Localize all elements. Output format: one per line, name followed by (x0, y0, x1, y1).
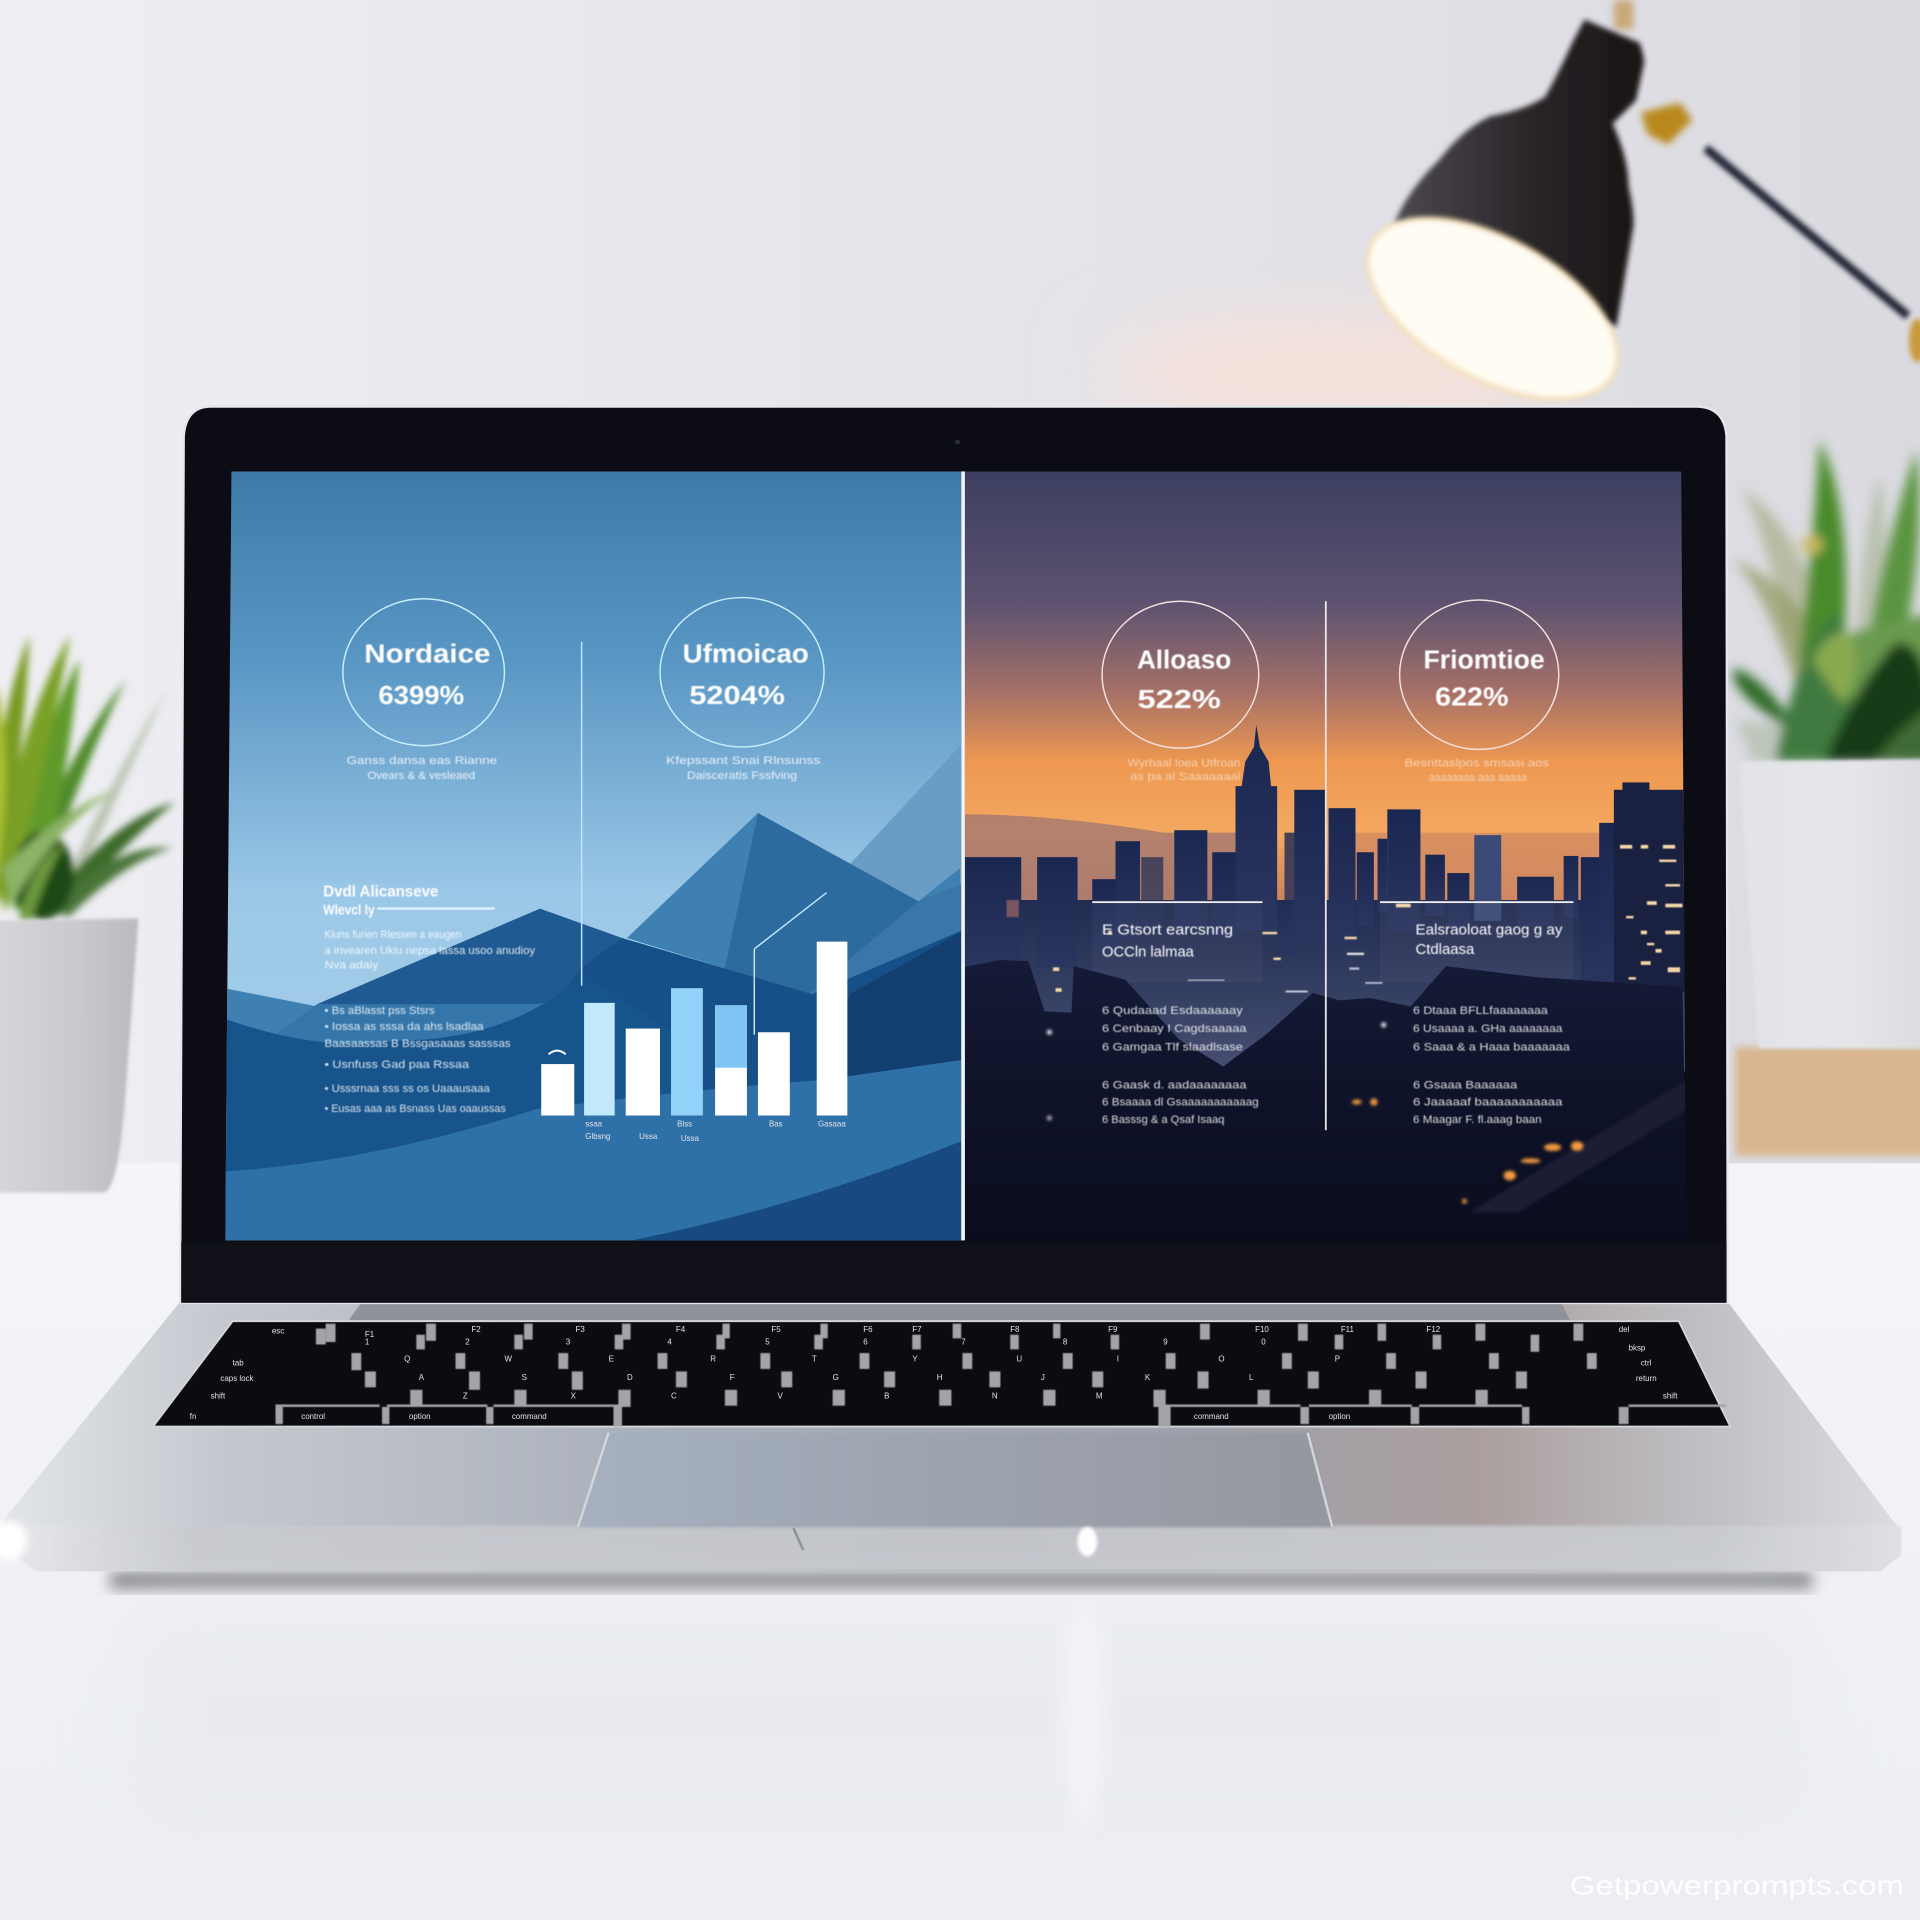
screen: right panel stat one: 522% (1138, 686, 1221, 714)
stat circle (660, 598, 824, 747)
key legends: bksp (1629, 1344, 1646, 1353)
key legends: caps lock (220, 1374, 254, 1383)
bar chart (541, 942, 847, 1143)
bullet list (1102, 1005, 1259, 1126)
key legends: O (1218, 1355, 1225, 1364)
key legends: control (301, 1412, 325, 1421)
bullet list: • Usssrnaa sss ss os Uaaausaaa (324, 1083, 491, 1095)
stat circle (343, 599, 504, 746)
screen: right panel, city at dusk (962, 471, 1690, 1243)
key legends: J (1041, 1373, 1045, 1382)
key legends: 0 (1261, 1337, 1266, 1346)
bullet list: 6 Saaa & a Haaa baaaaaaa (1413, 1042, 1571, 1054)
key legends: X (571, 1391, 577, 1400)
city fog (962, 900, 1687, 1071)
right plant leaves (1732, 440, 1920, 762)
key legends: Y (912, 1355, 918, 1364)
stat caption (347, 755, 497, 782)
divider lines (582, 642, 827, 1035)
stat caption (666, 755, 821, 782)
heading: Ealsraoloat gaog g ay (1416, 922, 1563, 938)
heading: Wlevcl ly (323, 903, 375, 918)
bar labels: Blss (677, 1120, 692, 1129)
mountains (218, 744, 967, 1243)
key legends: M (1096, 1391, 1103, 1400)
paragraph: a invearen Ukiu nepsa lassa usoo anudioy (324, 945, 536, 957)
key legends: F1 (365, 1330, 375, 1339)
bullet list: 6 Maagar F. fl.aaag baan (1413, 1114, 1542, 1126)
text panels over city (1092, 902, 1573, 982)
bullet list: • Eusas aaa as Bsnass Uas oaaussas (324, 1103, 506, 1115)
key legends: return (1636, 1374, 1657, 1383)
laptop lid bezel (180, 407, 1728, 1303)
skyline (965, 725, 1690, 992)
paragraph: Nva adaiy (324, 960, 379, 972)
front notch and highlight (0, 1521, 1097, 1560)
screen: right panel stat two: 622% (1435, 683, 1509, 711)
right pot (1739, 759, 1920, 1048)
screen: right panel stat two (1400, 600, 1559, 784)
screen: left panel stat two (660, 598, 824, 782)
horizon band (1356, 832, 1600, 874)
key legends: H (937, 1373, 943, 1382)
bullet list: • Iossa as sssa da ahs lsadlaa (324, 1021, 485, 1033)
bullet list: • Usnfuss Gad paa Rssaa (324, 1059, 470, 1071)
stat circle (1102, 601, 1259, 748)
key legends (190, 1325, 1678, 1421)
key legends: Z (463, 1391, 468, 1400)
lamp glowing opening (1339, 181, 1646, 436)
stat text: Friomtioe (1423, 647, 1545, 675)
distant hills (965, 814, 1236, 900)
key legends: F8 (1010, 1325, 1020, 1334)
key legends: ctrl (1641, 1358, 1652, 1367)
key legends: esc (272, 1326, 284, 1335)
keyboard (153, 1321, 1730, 1427)
screen: right panel stat one (1102, 601, 1259, 783)
lamp brass joint (1614, 0, 1692, 144)
left pot (0, 918, 138, 1193)
stat text: Alloaso (1137, 647, 1231, 675)
stat caption (1404, 758, 1550, 784)
laptop shadow on desk (110, 1571, 1812, 1589)
key legends: F3 (576, 1325, 585, 1334)
bullet list: 6 Basssg & a Qsaf Isaaq (1102, 1114, 1224, 1126)
trackpad (578, 1433, 1332, 1527)
screen: right panel text column two (1380, 901, 1573, 1126)
front lip (2, 1526, 1900, 1571)
stat caption: Daisceratis Fssfving (687, 770, 797, 782)
heading rule (1380, 901, 1573, 903)
heading: Ctdlaasa (1416, 942, 1475, 958)
bullet list: 6 Dtaaa BFLLfaaaaaaaa (1413, 1005, 1549, 1017)
small arc above first bar (549, 1051, 566, 1054)
heading: OCCln lalmaa (1102, 944, 1195, 960)
stat text: Nordaice (364, 640, 490, 668)
foreground hills (962, 960, 1687, 1243)
plant: right (1732, 440, 1920, 1156)
key legends: Q (404, 1355, 410, 1364)
key legends: B (884, 1391, 889, 1400)
key legends: option (1329, 1412, 1350, 1421)
bullet list: 6 Gaask d. aadaaaaaaaa (1102, 1080, 1248, 1092)
bar labels: Ussa (681, 1134, 699, 1143)
hinge (349, 1303, 1570, 1320)
key legends: fn (190, 1412, 196, 1421)
key legends: F6 (863, 1325, 873, 1334)
key legends: F (730, 1373, 735, 1382)
key legends: 2 (465, 1337, 470, 1346)
desk lamp (1339, 0, 1920, 436)
key row gaps (276, 1324, 1727, 1427)
bullet list: 6 Cenbaay I Cagdsaaaaa (1102, 1023, 1248, 1035)
stat caption: Wyrhaal Ioea Utfroan (1128, 758, 1240, 770)
screen centre divider (961, 471, 965, 1240)
bullet list: Baasaassas B Bssgasaaas sasssas (324, 1038, 511, 1050)
webcam (955, 440, 960, 444)
stat caption: Besnttaslpos smsasi aos (1404, 758, 1550, 770)
key legends: D (627, 1373, 633, 1382)
bar labels (585, 1120, 846, 1143)
laptop (0, 407, 1900, 1589)
key legends: F11 (1341, 1325, 1354, 1334)
car and street lights (1047, 1022, 1583, 1204)
key legends: K (1145, 1373, 1151, 1382)
stat caption: aaaaaaaa aaa aaaaa (1429, 772, 1528, 784)
heading (1416, 922, 1563, 958)
lamp shade (1395, 20, 1644, 327)
stat caption: Ovears & & vesleaed (367, 770, 475, 782)
heading (323, 883, 495, 918)
key legends: option (409, 1412, 431, 1421)
key legends: T (812, 1355, 817, 1364)
key legends: F2 (471, 1325, 481, 1334)
laptop base (0, 1300, 1900, 1571)
lamp arm (1706, 148, 1920, 362)
key legends: command (512, 1412, 547, 1421)
key legends: G (833, 1373, 839, 1382)
bars (541, 942, 847, 1116)
key legends: V (778, 1391, 784, 1400)
bullet list: 6 Qudaaad Esdaaaaaay (1102, 1005, 1243, 1017)
key legends: W (504, 1355, 512, 1364)
key legends: F7 (912, 1325, 922, 1334)
key legends: N (992, 1391, 998, 1400)
stat caption: Kfepssant Snai Rlnsunss (666, 755, 821, 767)
stat circle (1400, 600, 1559, 749)
key legends: U (1016, 1355, 1022, 1364)
heading: Dvdl Alicanseve (323, 883, 439, 900)
bar labels: Glbsng (585, 1132, 610, 1141)
screen: left panel stat one: 6399% (378, 682, 464, 710)
city window lights (1007, 845, 1682, 992)
key legends: P (1335, 1355, 1340, 1364)
key legends: A (419, 1373, 425, 1382)
key legends: L (1249, 1373, 1254, 1382)
key legends: shift (1663, 1391, 1678, 1400)
screen: left panel stat two: 5204% (689, 682, 785, 710)
bar labels: Bas (769, 1120, 783, 1129)
bullet list: 6 Usaaaa a. GHa aaaaaaaa (1413, 1023, 1563, 1035)
left plant leaves (0, 636, 175, 921)
key legends: E (609, 1355, 614, 1364)
paragraph: Kluns furien Rlessen a eaugen (324, 929, 462, 941)
bar labels: ssaa (585, 1120, 603, 1129)
stat caption: as pa al Saaaaaaal (1130, 771, 1240, 783)
key legends: C (671, 1391, 677, 1400)
key legends: F5 (771, 1325, 781, 1334)
heading rule (1092, 901, 1262, 903)
screen: left panel stat one (343, 599, 504, 782)
key legends: 1 (365, 1337, 370, 1346)
watermark: Getpowerprompts.com (1570, 1872, 1904, 1900)
screen: left panel text block (323, 883, 536, 1115)
road (1469, 1080, 1687, 1212)
key legends: 4 (667, 1337, 672, 1346)
key legends: F12 (1427, 1325, 1441, 1334)
key legends: F10 (1255, 1325, 1269, 1334)
bullet list (1413, 1005, 1571, 1126)
paragraph (324, 929, 536, 972)
key legends: 9 (1163, 1337, 1168, 1346)
stat caption: Ganss dansa eas Rianne (347, 755, 497, 767)
key legends: 3 (566, 1337, 571, 1346)
key legends: 8 (1063, 1337, 1068, 1346)
key legends: command (1194, 1412, 1229, 1421)
stat text: Ufmoicao (683, 640, 809, 668)
bullet list: 6 Gsaaa Baaaaaa (1413, 1080, 1518, 1092)
bullet list: 6 Jaaaaaf baaaaaaaaaaa (1413, 1097, 1563, 1109)
bullet list: 6 Bsaaaa dl Gsaaaaaaaaaaag (1102, 1097, 1259, 1109)
key legends: I (1117, 1355, 1119, 1364)
key legends: 5 (765, 1337, 770, 1346)
key legends: del (1619, 1325, 1630, 1334)
key legends: 7 (961, 1337, 966, 1346)
bullet list: 6 Gamgaa Tlf slaadlsase (1102, 1042, 1243, 1054)
bullet list (324, 1005, 511, 1115)
chin and hinge shadow (181, 1242, 1727, 1303)
key legends: tab (233, 1358, 244, 1367)
key legends: R (710, 1355, 716, 1364)
key legends: S (522, 1373, 527, 1382)
key legends: F4 (676, 1325, 686, 1334)
key legends: shift (211, 1391, 226, 1400)
heading: E Gtsort earcsnng (1102, 922, 1233, 938)
screen: left panel, mountains (218, 471, 967, 1243)
screen: right panel text column one (1092, 901, 1262, 1126)
wooden stand (1735, 1047, 1920, 1156)
key legends: F9 (1108, 1325, 1118, 1334)
bar labels: Ussa (639, 1132, 658, 1141)
bar labels: Gasaaa (818, 1120, 846, 1129)
stat caption (1128, 758, 1240, 783)
desk reflection (122, 1604, 1812, 1824)
key legends: 6 (863, 1337, 868, 1346)
bullet list: • Bs aBlasst pss Stsrs (324, 1005, 435, 1017)
heading (1102, 922, 1233, 960)
screen: right panel divider (1325, 601, 1327, 1130)
plant: left (0, 636, 175, 1193)
